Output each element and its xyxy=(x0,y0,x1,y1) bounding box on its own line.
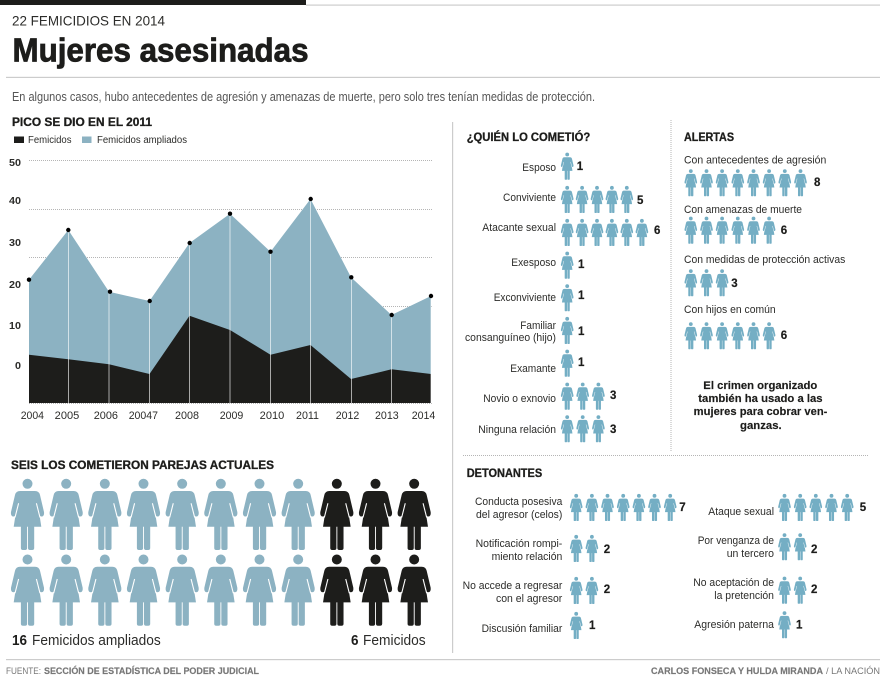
row: por venganza de un tercero xyxy=(698,533,817,560)
row: Familiar consanguíneo xyxy=(465,317,585,344)
row: Ninguna relación xyxy=(478,415,616,442)
panel: line area chart xyxy=(9,117,435,422)
x axis labels: 2005 xyxy=(55,410,79,422)
y axis labels: 50 xyxy=(9,157,21,169)
row: por venganza de un tercero: Por venganza de xyxy=(698,535,774,547)
panel: pictogram parejas actuales xyxy=(11,460,431,649)
row: notificación rompimiento xyxy=(476,535,610,563)
row: agresión paterna: Agresión paterna xyxy=(694,619,775,631)
caption: 16 ampliados: 16 xyxy=(12,632,27,649)
row: discusión familiar: Discusión familiar xyxy=(482,623,563,635)
row: discusión familiar xyxy=(482,612,596,639)
heading: DETONANTES xyxy=(467,468,543,480)
y axis labels: 30 xyxy=(9,237,21,249)
pictogram heading: SEIS LOS COMETIERON PAREJAS ACTUALES xyxy=(11,460,274,472)
footer: source: SECCIÓN DE ESTADÍSTICA DEL PODER JUDICIAL xyxy=(44,665,259,677)
row: Familiar consanguíneo: 1 xyxy=(578,326,585,338)
row: amenazas de muerte: 6 xyxy=(781,225,787,237)
x axis labels: 2006 xyxy=(94,410,118,422)
row: antecedentes de agresión: Con antecedentes de agresión xyxy=(684,154,826,166)
subtitle: En algunos casos, hubo antecedentes de agresión y amenazas de muerte, pero solo tres tenían medidas de protección. xyxy=(12,89,595,104)
row: notificación rompimiento: Notificación rompi- xyxy=(476,538,563,550)
x axis labels: 20047 xyxy=(129,410,158,422)
row: agresión paterna xyxy=(694,611,803,638)
row: Examante xyxy=(510,350,585,377)
caption: 6 femicidos: Femicidos xyxy=(363,632,426,649)
row: antecedentes de agresión xyxy=(684,154,826,196)
row: no accede a regresar xyxy=(463,577,610,605)
row: medidas de protección activas: Con medidas de protección activas xyxy=(684,254,846,266)
row: Novio o exnovio: Novio o exnovio xyxy=(483,393,556,405)
callout: crimen organizado: ganzas. xyxy=(740,420,782,432)
x axis labels: 2010 xyxy=(260,410,284,422)
row: ataque sexual: Ataque sexual xyxy=(708,506,774,518)
x axis labels: 2004 xyxy=(21,410,44,422)
row: agresión paterna: 1 xyxy=(796,620,803,632)
row: Conviviente: Conviviente xyxy=(503,192,556,204)
row: Ninguna relación: 3 xyxy=(610,424,616,436)
row: Familiar consanguíneo: consanguíneo (hijo) xyxy=(465,332,556,344)
callout: crimen organizado: El crimen organizado xyxy=(703,380,818,392)
row: no accede a regresar: No accede a regresar xyxy=(463,580,563,592)
row: no accede a regresar: con el agresor xyxy=(496,593,563,605)
panel: quién lo cometió xyxy=(465,131,660,442)
callout: crimen organizado xyxy=(694,380,828,432)
footer: credits: CARLOS FONSECA Y HULDA MIRANDA xyxy=(651,666,823,677)
row: Novio o exnovio xyxy=(483,383,616,410)
row: Atacante sexual xyxy=(482,219,660,246)
row: no aceptación de la pretención: 2 xyxy=(811,584,817,596)
row: Examante: 1 xyxy=(578,357,585,369)
footer: source: FUENTE: xyxy=(6,666,41,677)
row: no aceptación de la pretención xyxy=(693,577,817,604)
row: medidas de protección activas: 3 xyxy=(731,278,738,290)
x axis labels xyxy=(21,410,435,422)
caption: 6 femicidos: 6 xyxy=(351,632,358,649)
row: hijos en común xyxy=(684,304,787,349)
title: Mujeres asesinadas xyxy=(12,32,308,68)
panel: detonantes xyxy=(463,468,867,639)
row: discusión familiar: 1 xyxy=(589,620,596,632)
row: Atacante sexual: Atacante sexual xyxy=(482,222,556,234)
y axis labels: 10 xyxy=(9,320,21,332)
row: hijos en común: 6 xyxy=(781,330,787,342)
row: Exesposo: 1 xyxy=(578,259,585,271)
x axis labels: 2013 xyxy=(375,410,399,422)
row: no aceptación de la pretención: No aceptación de xyxy=(693,577,774,589)
x axis labels: 2014 xyxy=(412,410,435,422)
callout: crimen organizado: también ha usado a las xyxy=(698,393,823,405)
panel: alertas xyxy=(684,132,846,432)
top bar xyxy=(0,0,880,6)
callout: crimen organizado: mujeres para cobrar ven- xyxy=(694,406,828,418)
row: conducta posesiva xyxy=(475,494,686,521)
icons: first row xyxy=(11,479,431,550)
row: conducta posesiva: Conducta posesiva xyxy=(475,496,563,508)
row: notificación rompimiento: miento relación xyxy=(492,551,562,563)
row: por venganza de un tercero: un tercero xyxy=(727,548,774,560)
row: ataque sexual xyxy=(708,494,867,521)
row: hijos en común: Con hijos en común xyxy=(684,304,776,316)
row: antecedentes de agresión: 8 xyxy=(814,177,821,189)
x axis labels: 2009 xyxy=(220,410,243,422)
row: Conviviente xyxy=(503,186,644,213)
row: Atacante sexual: 6 xyxy=(654,225,660,237)
icons: second row xyxy=(11,554,431,626)
row: Familiar consanguíneo: Familiar xyxy=(520,320,556,332)
row: por venganza de un tercero: 2 xyxy=(811,544,817,556)
row: Esposo xyxy=(522,153,584,180)
row: Conviviente: 5 xyxy=(637,195,644,207)
area: femicidios xyxy=(29,316,431,403)
row: Ninguna relación: Ninguna relación xyxy=(478,424,556,436)
row: Exconviviente: 1 xyxy=(578,290,585,302)
caption: 16 ampliados: Femicidos ampliados xyxy=(32,632,161,649)
x axis labels: 2012 xyxy=(336,410,359,422)
y axis labels: 0 xyxy=(15,360,21,372)
row: Esposo: 1 xyxy=(577,161,584,173)
chart heading: PICO SE DIO EN EL 2011 xyxy=(12,117,153,129)
x axis labels: 2008 xyxy=(175,410,199,422)
heading: ALERTAS xyxy=(684,132,734,144)
row: amenazas de muerte: Con amenazas de muerte xyxy=(684,204,802,216)
data points xyxy=(27,197,433,317)
x axis labels: 2011 xyxy=(296,410,319,422)
row: Novio o exnovio: 3 xyxy=(610,390,616,402)
kicker: 22 FEMICIDIOS EN 2014 xyxy=(12,12,165,28)
row: no aceptación de la pretención: la pretención xyxy=(714,590,774,602)
y axis labels xyxy=(9,157,21,372)
row: amenazas de muerte xyxy=(684,204,802,244)
area: femicidios ampliados xyxy=(29,199,431,403)
row: Exconviviente xyxy=(494,284,585,311)
row: Esposo: Esposo xyxy=(522,162,556,174)
y axis labels: 40 xyxy=(9,195,21,207)
legend: Femicidos ampliados xyxy=(97,135,187,146)
row: conducta posesiva: 7 xyxy=(679,502,686,514)
legend xyxy=(14,135,187,146)
row: Exesposo xyxy=(511,252,585,279)
legend: Femicidos xyxy=(28,135,72,146)
row: Exesposo: Exesposo xyxy=(511,257,556,269)
row: ataque sexual: 5 xyxy=(860,502,867,514)
heading: ¿QUIÉN LO COMETIÓ? xyxy=(467,131,590,144)
y axis labels: 20 xyxy=(9,279,21,291)
row: no accede a regresar: 2 xyxy=(604,584,610,596)
row: notificación rompimiento: 2 xyxy=(604,544,610,556)
row: conducta posesiva: del agresor (celos) xyxy=(476,509,562,521)
row: medidas de protección activas xyxy=(684,254,846,296)
row: Exconviviente: Exconviviente xyxy=(494,292,556,304)
row: Examante: Examante xyxy=(510,363,556,375)
